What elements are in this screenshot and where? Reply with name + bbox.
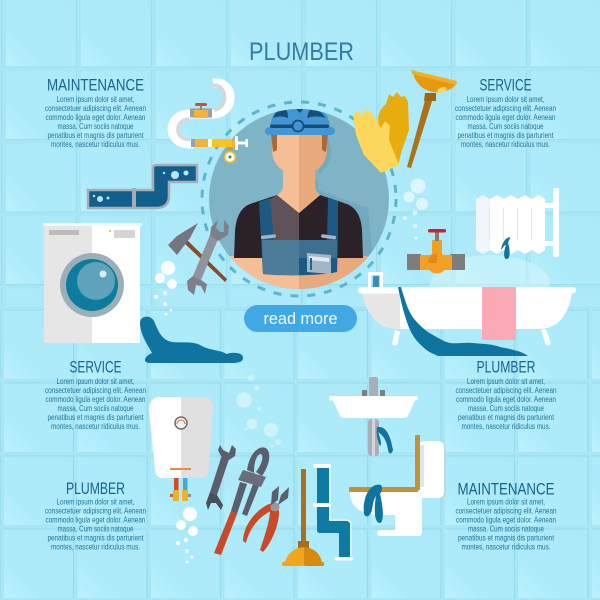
text block: service left: Lorem ipsum dolor sit amet,: [56, 376, 134, 386]
text block: plumber left: consectetuer adipiscing elit. Aenean: [45, 506, 146, 516]
text block: plumber right: massa. Cum sociis natoque: [468, 403, 544, 413]
bubbles: upper right: [403, 178, 428, 240]
text block: service top right: SERVICE: [480, 76, 532, 94]
icon: washing machine: [43, 223, 142, 343]
text block: service top right: penatibus et magnis dis parturient: [458, 130, 554, 140]
hard hat: [265, 109, 335, 135]
text block: service top right: [455, 76, 556, 149]
pink towel: [482, 287, 516, 340]
text block: service top right: Lorem ipsum dolor sit amet,: [466, 94, 544, 104]
read more button: [244, 305, 357, 332]
face: [271, 135, 328, 171]
icon: gloves: [353, 92, 409, 173]
text block: service top right: consectetuer adipiscing elit. Aenean: [455, 103, 556, 113]
icon: bathtub: [358, 272, 576, 356]
text block: service left: [45, 358, 146, 431]
text block: maintenance top left: montes, nascetur ridiculus mus.: [51, 139, 140, 149]
title: PLUMBER: [249, 38, 354, 66]
text block: plumber left: [45, 480, 146, 552]
text block: plumber right: consectetuer adipiscing elit. Aenean: [456, 385, 557, 395]
text block: service left: consectetuer adipiscing elit. Aenean: [45, 385, 146, 395]
text block: plumber left: penatibus et magnis dis parturient: [48, 532, 144, 542]
plumber portrait circle: [202, 97, 396, 296]
text block: service top right: commodo ligula eget dolor. Aenean: [456, 112, 556, 122]
text block: service left: SERVICE: [70, 358, 122, 376]
icon: sink: [329, 377, 418, 456]
text block: plumber right: commodo ligula eget dolor. Aenean: [456, 394, 556, 404]
text block: maintenance right: penatibus et magnis dis parturient: [458, 532, 554, 542]
text block: plumber left: montes, nascetur ridiculus mus.: [51, 542, 140, 552]
text block: plumber right: [456, 358, 557, 431]
text block: service left: commodo ligula eget dolor. Aenean: [46, 394, 146, 404]
icon: drain pipe: [313, 464, 353, 560]
text block: plumber left: Lorem ipsum dolor sit amet,: [56, 496, 134, 506]
text block: maintenance top left: MAINTENANCE: [47, 76, 144, 94]
text block: maintenance right: montes, nascetur ridiculus mus.: [462, 542, 550, 552]
icon: valve: [407, 229, 465, 274]
text block: service left: penatibus et magnis dis parturient: [48, 412, 144, 422]
icon: open-end wrench: [206, 445, 236, 510]
icon: yellow pipes with valve and gauge: [172, 83, 248, 162]
text block: maintenance top left: penatibus et magnis dis parturient: [48, 130, 144, 140]
text block: maintenance right: commodo ligula eget dolor. Aenean: [456, 514, 556, 524]
neck: [277, 170, 320, 213]
icon: plunger lower: [282, 469, 324, 566]
arms: [230, 256, 368, 289]
icon: plunger upper: [407, 70, 457, 168]
spilled water: [398, 287, 528, 356]
text block: service top right: montes, nascetur ridiculus mus.: [461, 139, 550, 149]
text block: maintenance top left: massa. Cum sociis natoque: [58, 121, 134, 131]
overalls: [259, 198, 338, 275]
text block: plumber left: massa. Cum sociis natoque: [58, 524, 134, 534]
read more button: read more: [264, 309, 338, 328]
text block: plumber right: PLUMBER: [476, 358, 536, 376]
text block: plumber left: commodo ligula eget dolor. Aenean: [46, 514, 146, 524]
text block: maintenance top left: consectetuer adipiscing elit. Aenean: [45, 103, 146, 113]
bubbles: under heater: [176, 507, 198, 564]
text block: maintenance right: Lorem ipsum dolor sit amet,: [467, 496, 545, 506]
text block: maintenance right: MAINTENANCE: [458, 480, 554, 498]
text block: plumber right: penatibus et magnis dis parturient: [458, 412, 554, 422]
icon: blue duct with bubbles: [88, 165, 197, 209]
text block: plumber right: montes, nascetur ridiculus mus.: [462, 421, 550, 431]
bubbles: left: [154, 261, 177, 315]
text block: plumber left: PLUMBER: [66, 480, 125, 498]
icon: radiator: [476, 188, 559, 259]
icon: water puddle left: [140, 317, 243, 363]
text block: plumber right: Lorem ipsum dolor sit amet,: [467, 376, 545, 386]
icon: pipe wrench: [214, 447, 269, 555]
text block: maintenance top left: commodo ligula eget dolor. Aenean: [46, 112, 146, 122]
icon: water heater: [149, 397, 213, 501]
text block: service top right: massa. Cum sociis natoque: [468, 121, 544, 131]
text block: service left: montes, nascetur ridiculus mus.: [51, 421, 140, 431]
text block: service left: massa. Cum sociis natoque: [58, 403, 134, 413]
text block: maintenance right: consectetuer adipiscing elit. Aenean: [456, 506, 557, 516]
icon: toilet: [349, 435, 446, 536]
icon: pliers: [243, 486, 289, 552]
bubbles: centre bottom: [236, 375, 281, 448]
shirt: [234, 195, 363, 258]
text block: maintenance right: massa. Cum sociis natoque: [468, 524, 544, 534]
icon: crossed hammer and wrench: [168, 220, 229, 295]
text block: maintenance top left: Lorem ipsum dolor sit amet,: [56, 94, 134, 104]
text block: maintenance right: [456, 480, 557, 552]
text block: maintenance top left: [45, 76, 146, 149]
